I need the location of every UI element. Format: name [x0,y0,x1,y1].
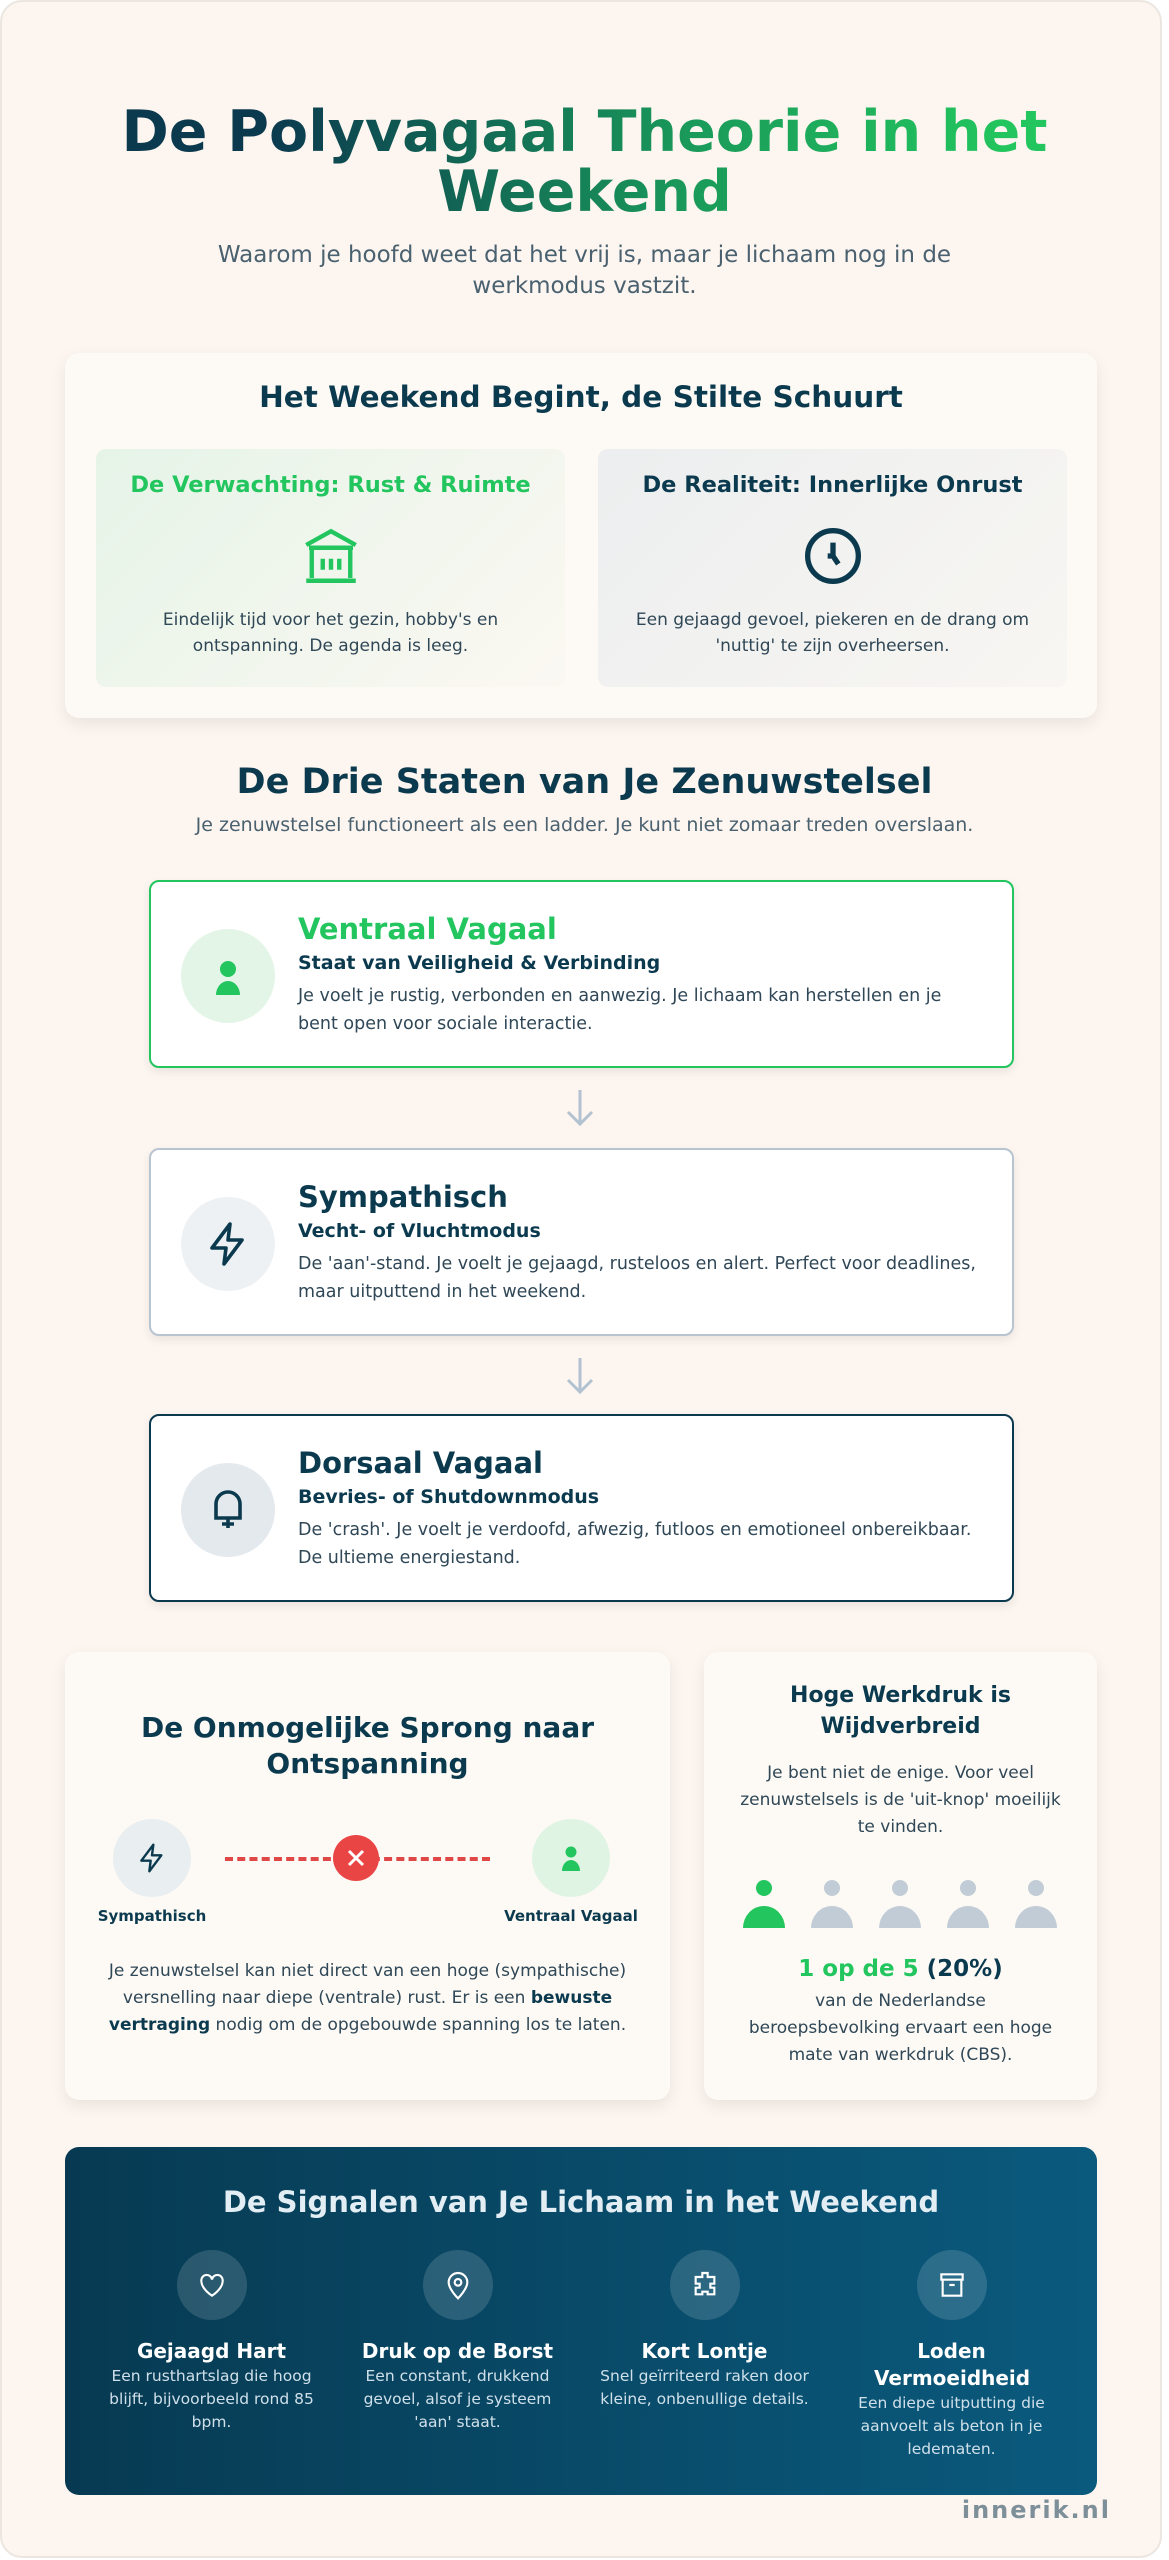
card: dorsaal vagaal: De 'crash'. Je voelt je verdoofd, afwezig, futloos en emotioneel onbereikbaar. De ultieme energiestand. [298,1520,971,1568]
signal: vermoeidheid: Een diepe uitputting die aanvoelt als beton in je ledematen. [858,2394,1045,2458]
card: realiteit: Een gejaagd gevoel, piekeren en de drang om 'nuttig' te zijn overheersen. [636,610,1029,656]
section heading: drie staten: De Drie Staten van Je Zenuwstelsel [237,762,932,802]
signal: hart: Een rusthartslag die hoog blijft, bijvoorbeeld rond 85 bpm. [109,2367,314,2431]
icon: person [181,929,275,1023]
card: ventraal vagaal: Je voelt je rustig, verbonden en aanwezig. Je lichaam kan herstellen en je [298,986,941,1006]
arrow [567,1090,593,1126]
card: ventraal vagaal: Ventraal Vagaal [298,912,557,946]
diagram: sprong [98,1819,638,1925]
card: ventraal vagaal [149,880,1014,1068]
diagram: sprong: Ventraal Vagaal [504,1907,638,1925]
heading: Het Weekend Begint, de Stilte Schuurt [259,380,903,414]
diagram: sprong: Sympathisch [98,1907,206,1925]
signal: hart: Gejaagd Hart [137,2339,286,2363]
card: dorsaal vagaal: Bevries- of Shutdownmodus [298,1486,599,1508]
title: De Polyvagaal Theorie in het Weekend [121,99,1048,225]
panel: signalen [65,2147,1097,2495]
panel: werkdruk [704,1652,1097,2100]
panel: onmogelijke sprong [65,1652,670,2100]
subtitle: Waarom je hoofd weet dat het vrij is, maar je lichaam nog in de werkmodus vastzit. [218,242,951,299]
icon: building [305,528,357,583]
section subtitle: Je zenuwstelsel functioneert als een ladder. Je kunt niet zomaar treden overslaan. [196,814,973,836]
panel: weekend begint [65,353,1097,718]
icon: lightning [181,1197,275,1291]
icons: people [743,1880,1057,1928]
card: realiteit [598,449,1067,687]
signal: vermoeidheid [858,2250,1045,2458]
signal: hart [109,2250,314,2431]
card: sympathisch: Vecht- of Vluchtmodus [298,1220,541,1242]
signal: vermoeidheid: Loden Vermoeidheid [874,2339,1030,2390]
card: verwachting [96,449,565,687]
heading: De Signalen van Je Lichaam in het Weekend [223,2185,939,2219]
panel: werkdruk: van de Nederlandse [815,1991,986,2011]
signal: lontje: Kort Lontje [642,2339,767,2363]
card: dorsaal vagaal [149,1414,1014,1602]
text: Je zenuwstelsel kan niet direct van een hoge (sympathische) versnelling naar diepe (ventrale) rust. Er is een bewuste vertraging nodig om de opgebouwde spanning los te laten. [109,1961,626,2035]
stat: 1 op de 5 (20%) [798,1956,1003,1982]
card: dorsaal vagaal: Dorsaal Vagaal [298,1446,543,1480]
signal: borst: Een constant, drukkend gevoel, alsof je systeem 'aan' staat. [364,2367,551,2431]
card: ventraal vagaal: bent open voor sociale interactie. [298,1014,593,1034]
card: sympathisch: De 'aan'-stand. Je voelt je gejaagd, rusteloos en alert. Perfect voor deadlines, maar uitputtend in het weekend. [298,1254,976,1302]
card: ventraal vagaal: Staat van Veiligheid & Verbinding [298,952,660,974]
arrow [567,1358,593,1394]
panel: werkdruk: beroepsbevolking ervaart een hoge mate van werkdruk (CBS). [749,2018,1052,2065]
signal: borst: Druk op de Borst [362,2339,553,2363]
footer: brand: innerik.nl [962,2496,1111,2524]
card: sympathisch [149,1148,1014,1336]
text: Je bent niet de enige. Voor veel zenuwstelsels is de 'uit-knop' moeilijk te vinden. [740,1763,1061,1837]
signal: lontje: Snel geïrriteerd raken door kleine, onbenullige details. [600,2367,809,2408]
card: verwachting: Eindelijk tijd voor het gezin, hobby's en ontspanning. De agenda is leeg. [163,610,498,656]
card: sympathisch: Sympathisch [298,1180,508,1214]
heading: Hoge Werkdruk is Wijdverbreid [790,1683,1011,1739]
card: realiteit: De Realiteit: Innerlijke Onrust [642,472,1023,498]
signal: borst [362,2250,553,2431]
icon: clock [805,528,861,584]
icon: bell [181,1463,275,1557]
signal: lontje [600,2250,809,2408]
heading: De Onmogelijke Sprong naar Ontspanning [141,1711,594,1780]
card: verwachting: De Verwachting: Rust & Ruimte [130,472,531,498]
